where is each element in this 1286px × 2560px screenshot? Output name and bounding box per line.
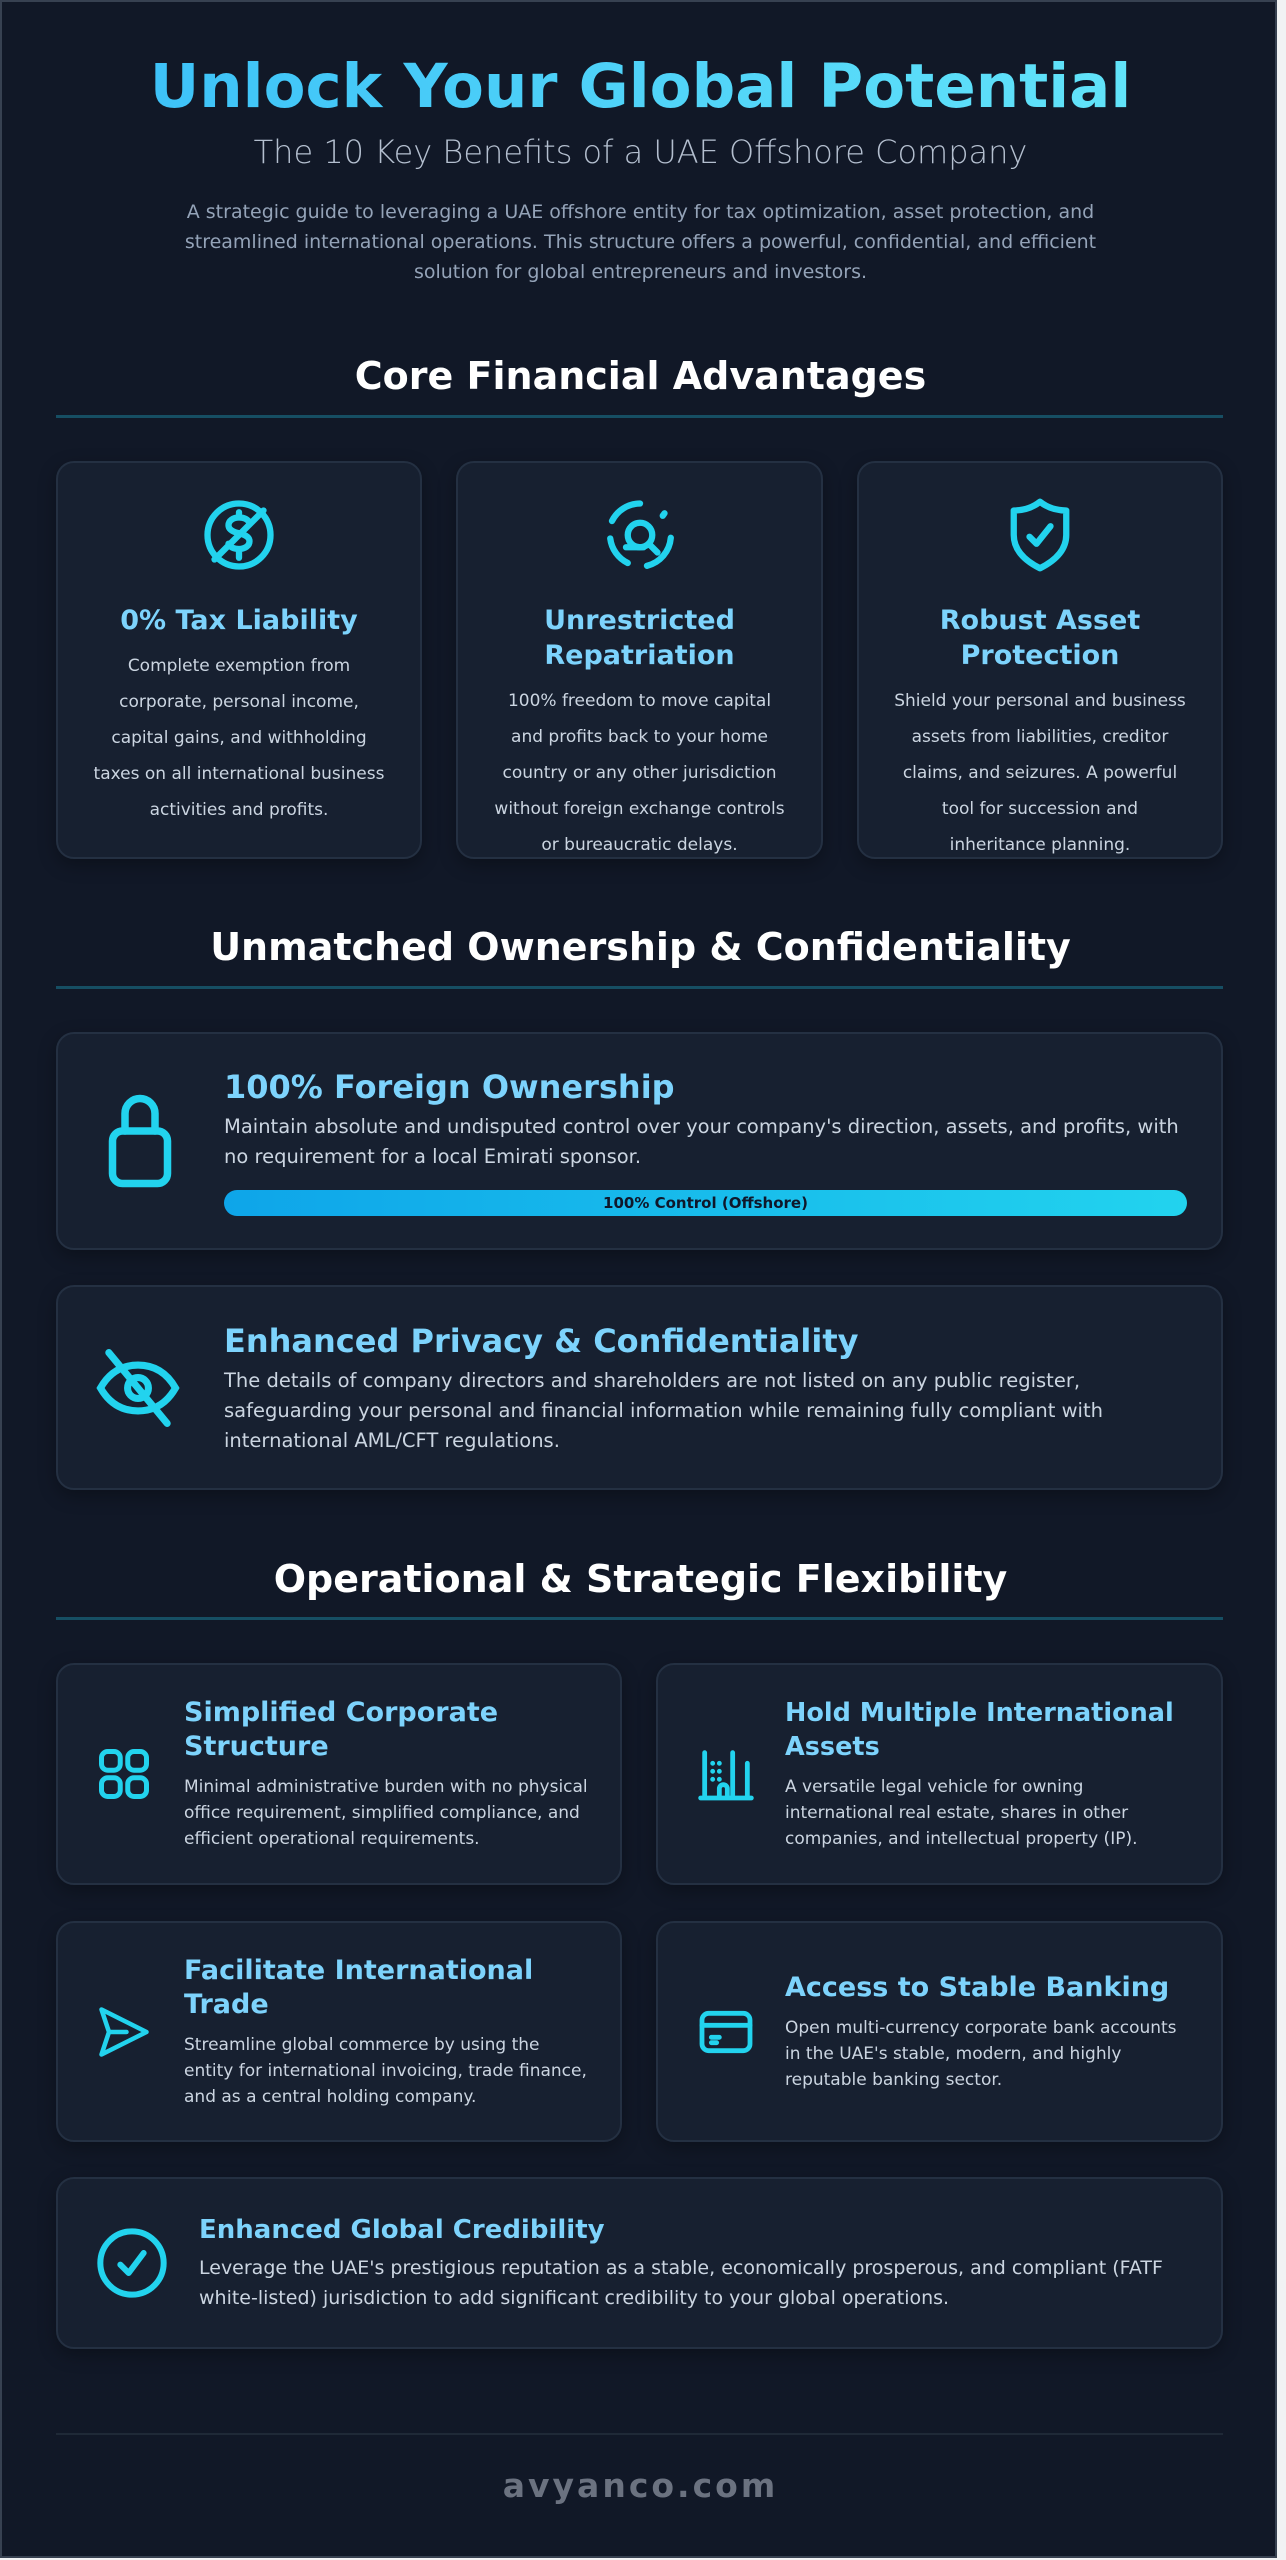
card text: Complete exemption from corporate, personal income, capital gains, and withholding taxes on all international business activities and profits. [94, 656, 384, 820]
icon: lock [108, 1094, 172, 1188]
text: A versatile legal vehicle for owning international real estate, shares in other companies, and intellectual property (IP). [785, 1777, 1138, 1849]
subtitle: The 10 Key Benefits of a UAE Offshore Company [254, 133, 1027, 171]
progress bar [224, 1190, 1187, 1216]
card: 0% Tax Liability [56, 461, 422, 859]
icon: repatriation [607, 500, 674, 569]
text: Minimal administrative burden with no physical office requirement, simplified compliance, and efficient operational requirements. [184, 1777, 588, 1849]
text [184, 2034, 587, 2106]
card text: Shield your personal and business assets from liabilities, creditor claims, and seizures. A powerful tool for succession and inheritance planning. [894, 691, 1186, 855]
intro text: A strategic guide to leveraging a UAE offshore entity for tax optimization, asset protection, and streamlined international operations. This structure offers a powerful, confidential, and efficient solution for global entrepreneurs and investors. [185, 201, 1096, 283]
text: The details of company directors and shareholders are not listed on any public register, safeguarding your personal and financial information while remaining fully compliant with international AML/CFT regulations. [224, 1368, 1103, 1452]
text: Open multi-currency corporate bank accounts in the UAE's stable, modern, and highly reputable banking sector. [785, 2018, 1177, 2090]
footer brand: avyanco.com [503, 2466, 778, 2505]
card title: Robust Asset Protection [940, 605, 1140, 671]
text: Maintain absolute and undisputed control over your company's direction, assets, and profits, with no requirement for a local Emirati sponsor. [224, 1115, 1179, 1168]
heading: Operational & Strategic Flexibility: Operational & Strategic Flexibility [274, 1557, 1007, 1601]
progress bar: 100% Control (Offshore) [603, 1194, 808, 1212]
card: Simplified Corporate Structure [56, 1663, 622, 1885]
card: Enhanced Global Credibility [56, 2177, 1223, 2349]
text: entity for international invoicing, trade finance, and as a central holding company. [184, 2060, 587, 2106]
card: Robust Asset Protection [857, 461, 1223, 859]
icon: send [99, 2007, 149, 2057]
heading: Unmatched Ownership & Confidentiality: Unmatched Ownership & Confidentiality [210, 925, 1071, 969]
title: Hold Multiple International [785, 1698, 1174, 1728]
title [785, 1698, 1174, 1762]
card: Access to Stable Banking [656, 1921, 1223, 2142]
card: Unrestricted Repatriation [456, 461, 823, 859]
title: Unlock Your Global Potential [150, 51, 1131, 122]
icon: card [700, 2010, 752, 2054]
title: Enhanced Global Credibility [199, 2215, 605, 2245]
card: 100% Foreign Ownership [56, 1032, 1223, 1250]
icon: no dollar [204, 500, 274, 570]
icon: shield check [1010, 498, 1070, 572]
title: Access to Stable Banking [785, 1972, 1169, 2002]
card: Facilitate International Trade [56, 1921, 622, 2142]
text: Streamline global commerce by using the [184, 2034, 539, 2054]
title: Simplified Corporate Structure [184, 1697, 498, 1762]
text: Leverage the UAE's prestigious reputation as a stable, economically prosperous, and compliant (FATF white-listed) jurisdiction to add significant credibility to your global operations. [199, 2257, 1163, 2309]
title: 100% Foreign Ownership [224, 1068, 675, 1106]
icon: eye off [96, 1349, 180, 1427]
card title: Unrestricted Repatriation [544, 605, 735, 671]
card text: 100% freedom to move capital and profits back to your home country or any other jurisdiction without foreign exchange controls or bureaucratic delays. [494, 691, 785, 855]
card title: 0% Tax Liability [120, 605, 358, 636]
icon: grid [99, 1749, 149, 1799]
title: Enhanced Privacy & Confidentiality [224, 1322, 858, 1360]
icon: check circle [97, 2228, 167, 2298]
title: Assets [785, 1732, 880, 1762]
card: Enhanced Privacy & Confidentiality [56, 1285, 1223, 1490]
card: Hold Multiple International Assets [656, 1663, 1223, 1885]
title [2, 42, 1279, 132]
title: Facilitate International Trade [184, 1954, 533, 2020]
heading: Core Financial Advantages: Core Financial Advantages [355, 354, 926, 398]
icon: building [698, 1750, 754, 1800]
